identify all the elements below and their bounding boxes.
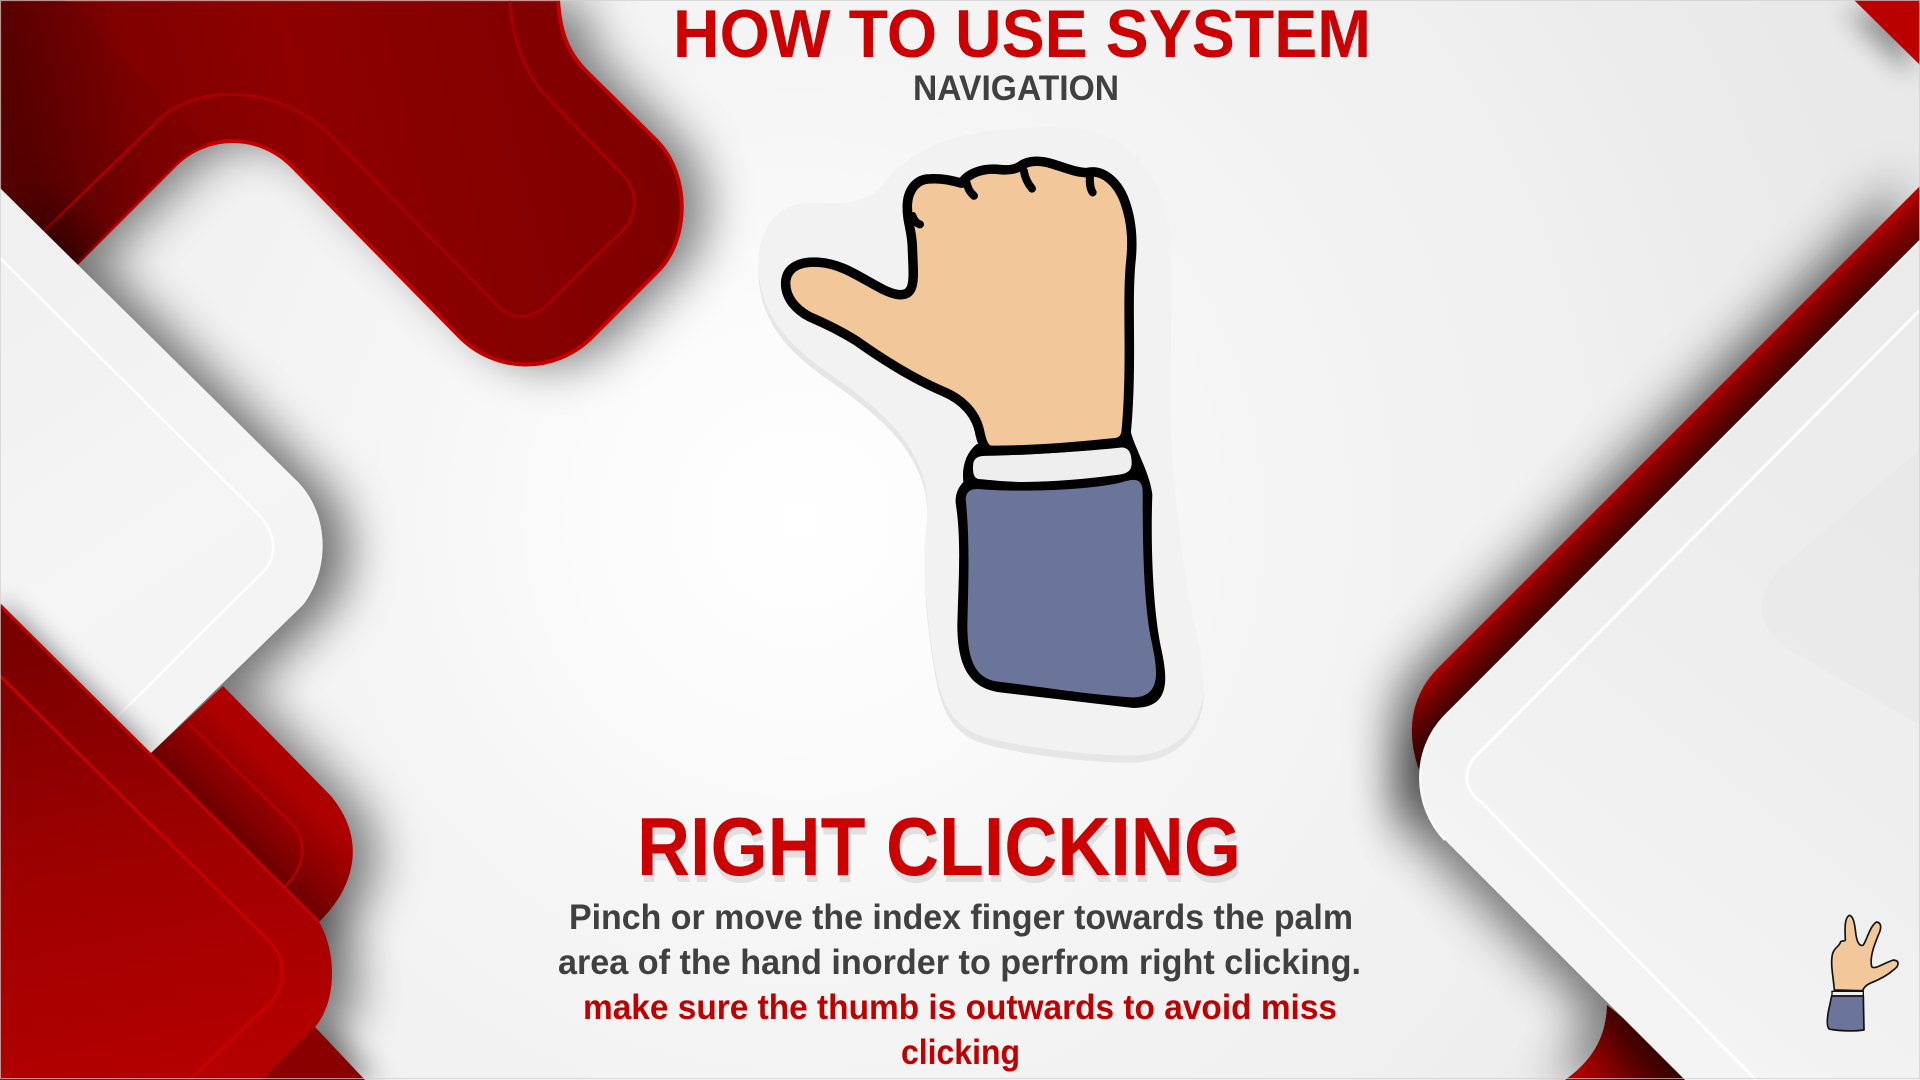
text block: warning	[583, 988, 1337, 1072]
text block: warning: clicking	[901, 1033, 1020, 1072]
shirt cuff	[973, 447, 1132, 482]
text block: warning: make sure the thumb is outwards to avoid miss	[583, 988, 1337, 1027]
text block: instructions: Pinch or move the index finger towards the palm	[569, 898, 1353, 937]
small hand palm and fingers	[1832, 915, 1898, 991]
sticker backing	[758, 127, 1203, 763]
panel: bottom-left red corner piece	[230, 1027, 365, 1080]
panel: right white panel	[1400, 241, 1920, 1080]
small hand sleeve	[1827, 996, 1864, 1031]
text block: instructions	[558, 898, 1361, 982]
knuckle creases	[913, 171, 1093, 224]
panel: right red strip	[1392, 180, 1920, 834]
panel: top-right red corner	[1844, 0, 1920, 75]
icon: sticker hand showing right click gesture	[758, 127, 1203, 763]
text block: instructions: area of the hand inorder to perfrom right clicking.	[558, 943, 1361, 982]
small hand cuff	[1832, 991, 1863, 996]
heading: right clicking: RIGHT CLICKING	[637, 800, 1241, 893]
sleeve and cuff outline	[956, 431, 1165, 708]
blue sleeve	[966, 480, 1156, 697]
panel: lower-left red front ribbon	[0, 605, 332, 1080]
icon: small hand with three fingers raised	[1827, 915, 1898, 1031]
panel: top-left red ribbon	[0, 0, 706, 365]
palm and thumb	[786, 161, 1132, 450]
shadows: lower-left ribbons	[24, 609, 379, 1080]
panel: bottom-right red piece	[1545, 1005, 1700, 1080]
panel: lower-left red back ribbon	[151, 686, 353, 922]
heading: right clicking: RIGHT CLICKING	[639, 807, 1243, 900]
subtitle: NAVIGATION	[913, 69, 1119, 108]
panel: lower-left white panel	[0, 188, 349, 824]
